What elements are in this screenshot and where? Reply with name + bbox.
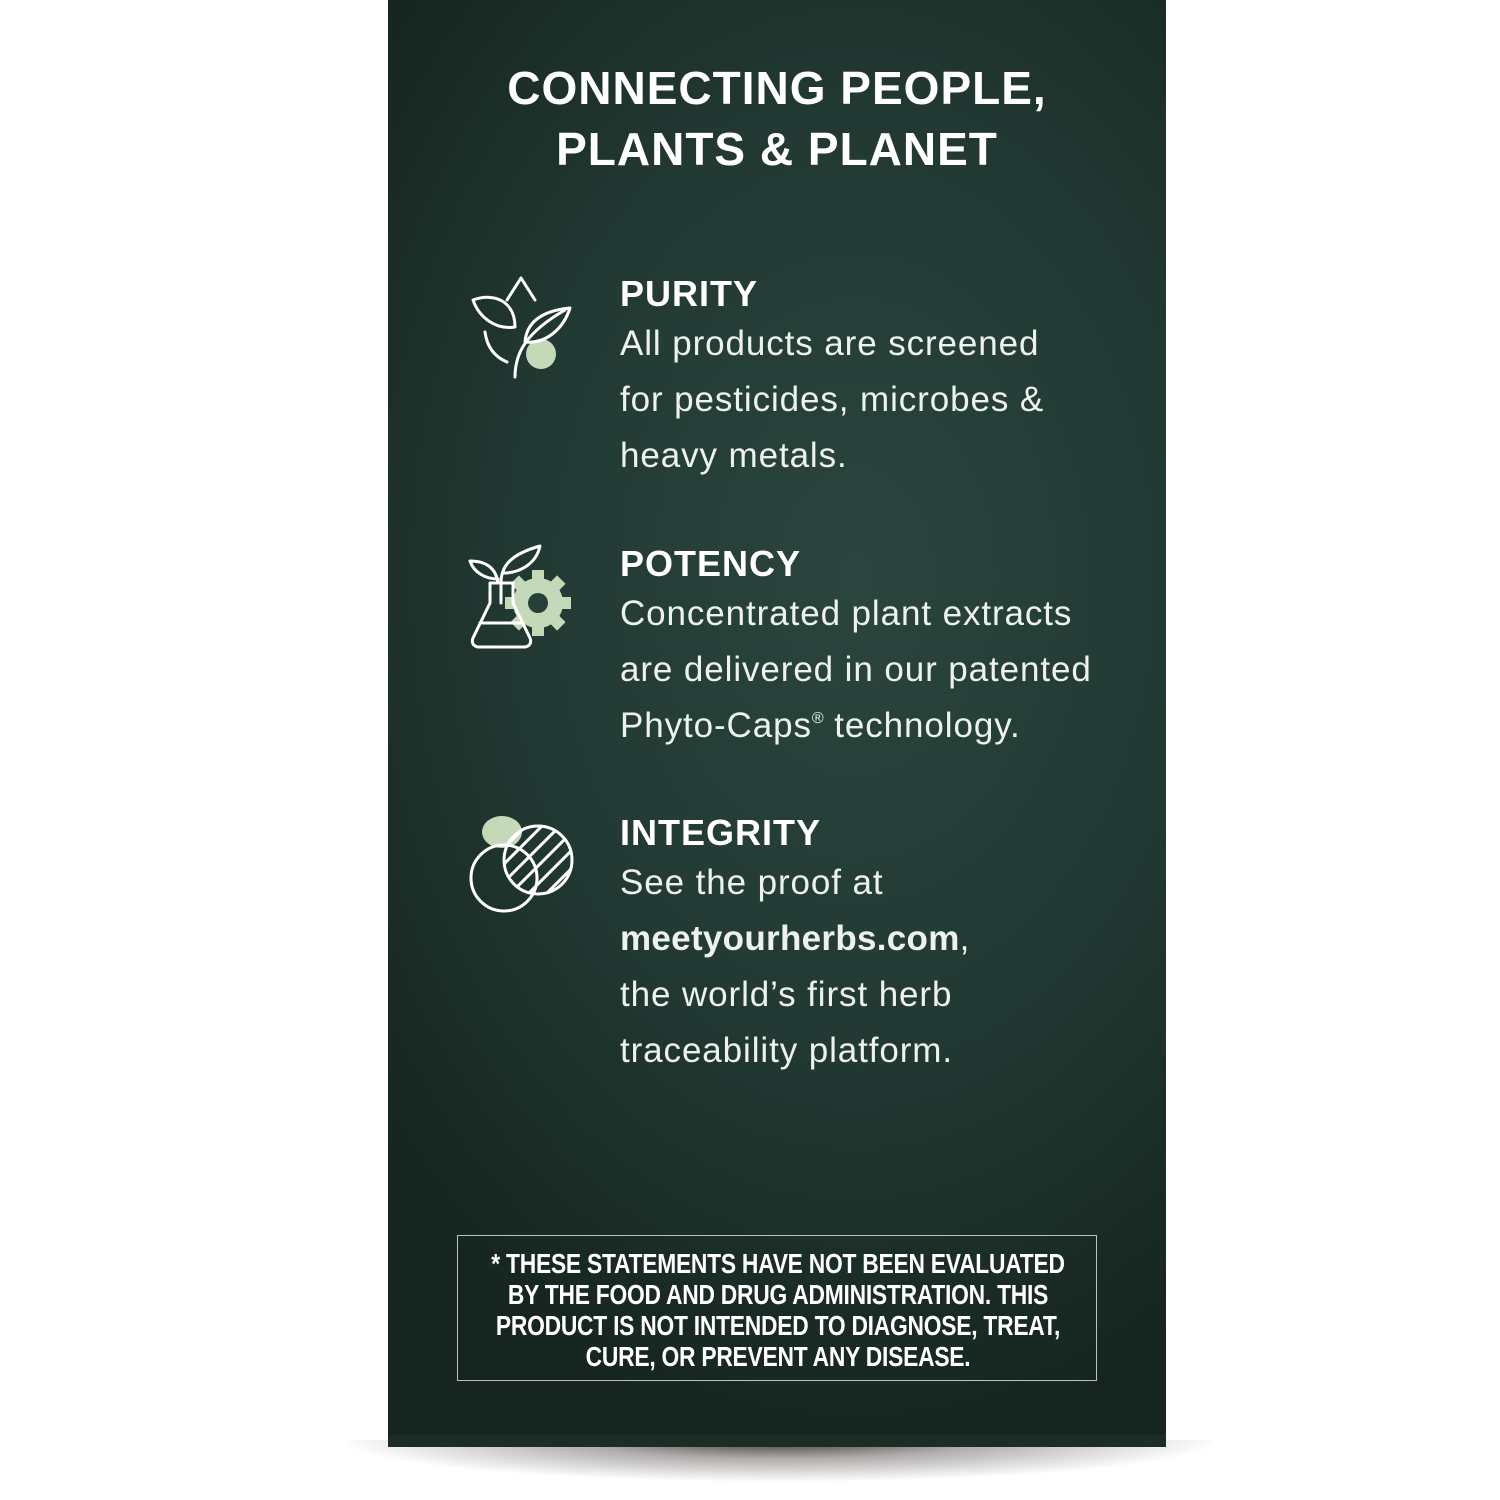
disclaimer box: PRODUCT IS NOT INTENDED TO DIAGNOSE, TREAT, (496, 1310, 1060, 1341)
icon: potency flask and gear (468, 544, 571, 648)
section: potency: are delivered in our patented (620, 650, 1092, 689)
section: integrity (620, 812, 970, 1070)
section: potency: Phyto-Caps® technology. (620, 706, 1021, 745)
section: integrity: INTEGRITY (620, 812, 821, 853)
panel: package back (388, 0, 1166, 1447)
section: purity: for pesticides, microbes & (620, 380, 1044, 419)
title (507, 62, 1047, 175)
section: integrity: the world’s first herb (620, 975, 952, 1014)
disclaimer box: * THESE STATEMENTS HAVE NOT BEEN EVALUATED (491, 1248, 1065, 1279)
section: potency: Concentrated plant extracts (620, 594, 1072, 633)
shadow under package (340, 1440, 1220, 1500)
title: CONNECTING PEOPLE, (507, 62, 1047, 114)
disclaimer box: CURE, OR PREVENT ANY DISEASE. (586, 1341, 970, 1372)
icon: integrity circles (470, 816, 574, 912)
section: integrity: meetyourherbs.com, (620, 919, 970, 958)
section: purity: PURITY (620, 273, 758, 314)
disclaimer box: BY THE FOOD AND DRUG ADMINISTRATION. THIS (508, 1279, 1048, 1310)
disclaimer box (457, 1235, 1097, 1381)
section: potency (620, 543, 1092, 745)
section: integrity: See the proof at (620, 863, 883, 902)
section: purity: heavy metals. (620, 436, 848, 475)
title: PLANTS & PLANET (556, 123, 998, 175)
section: purity: All products are screened (620, 324, 1039, 363)
icon: purity leaves and drop (472, 276, 572, 378)
section: purity (620, 273, 1044, 475)
section: integrity: traceability platform. (620, 1031, 953, 1070)
section: potency: POTENCY (620, 543, 801, 584)
